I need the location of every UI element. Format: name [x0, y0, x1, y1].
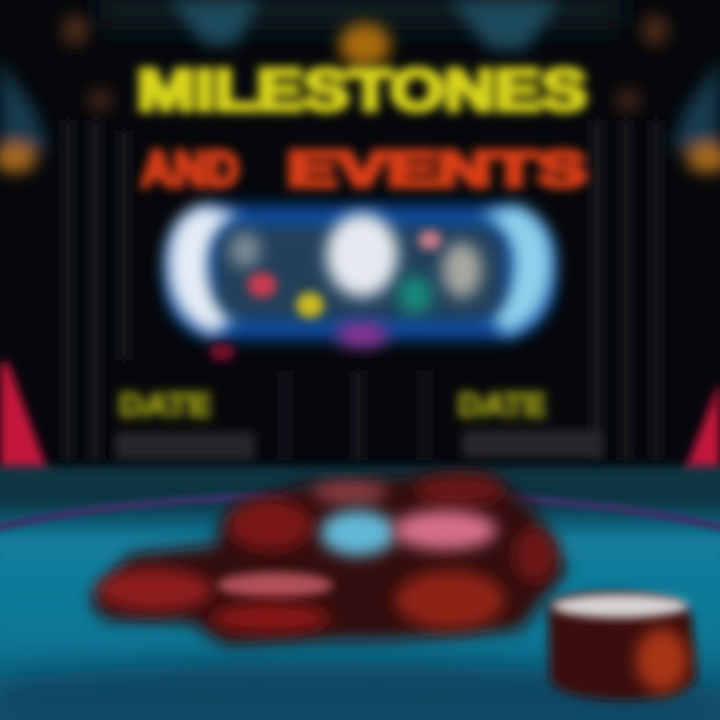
stage lights	[0, 0, 720, 173]
left caption	[115, 387, 255, 460]
chip pile	[90, 472, 566, 645]
title: yellow heading: MILESTONES	[137, 58, 587, 123]
subtitle: orange heading: AND	[141, 141, 239, 197]
large foreground chip	[548, 592, 696, 700]
poker table	[0, 466, 720, 720]
subtitle: orange heading: EVENTS	[287, 141, 587, 197]
red side drapes	[0, 362, 720, 482]
right caption: DATE	[458, 387, 546, 423]
subtitle: orange heading	[141, 141, 587, 197]
left caption: DATE	[119, 387, 211, 423]
right caption	[458, 387, 602, 458]
central badge panel	[165, 205, 555, 361]
